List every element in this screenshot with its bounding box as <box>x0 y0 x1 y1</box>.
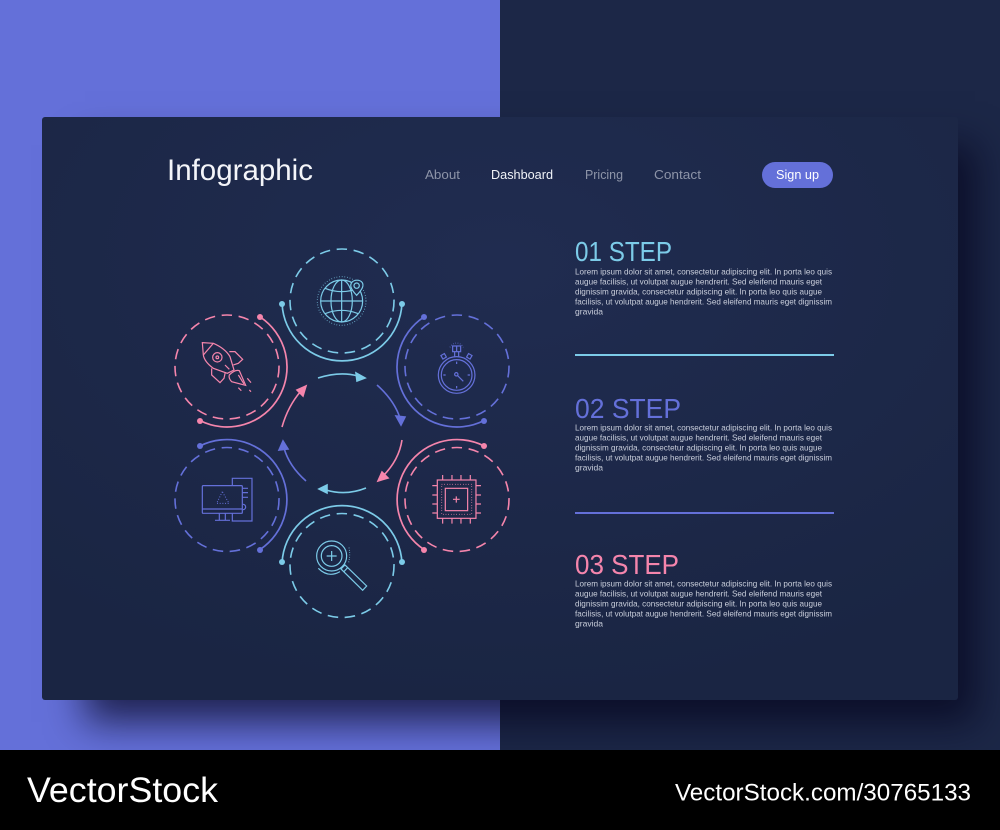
node: magnifier <box>279 506 405 618</box>
text block: step 3: Lorem ipsum dolor sit amet, consectetur adipiscing elit. In porta leo quis <box>575 578 832 588</box>
text block: step 2: augue facilisis, ut volutpat augue hendrerit. Sed eleifend mauris eget <box>575 432 823 442</box>
icon: magnifier <box>317 541 367 590</box>
divider: step 2 <box>575 512 834 514</box>
text block: step 1: gravida <box>575 306 603 316</box>
watermark: url: VectorStock.com/30765133 <box>675 780 971 806</box>
icon: stopwatch <box>438 343 475 393</box>
arrow: upper left <box>282 386 306 427</box>
arrow: lower right <box>378 440 402 481</box>
text block: step 1: Lorem ipsum dolor sit amet, consectetur adipiscing elit. In porta leo quis <box>575 266 832 276</box>
step 2 <box>575 393 834 514</box>
node: stopwatch <box>397 314 509 427</box>
node: globe <box>279 249 405 361</box>
text block: step 2: facilisis, ut volutpat augue hendrerit. Sed eleifend mauris eget dignissim <box>575 452 832 462</box>
icon: globe with pin <box>317 277 366 325</box>
watermark bar <box>0 750 1000 830</box>
text block: step 1: augue facilisis, ut volutpat augue hendrerit. Sed eleifend mauris eget <box>575 276 823 286</box>
heading: 02 STEP: 02 STEP <box>575 393 681 424</box>
step 3 <box>575 549 832 628</box>
icon: microchip <box>432 475 481 524</box>
main card <box>42 117 958 700</box>
background: right navy panel <box>500 0 1000 750</box>
text block: step 1 <box>575 266 832 316</box>
navigation <box>425 167 701 182</box>
background: left indigo panel <box>0 0 500 750</box>
text block: step 3: dignissim gravida, consectetur adipiscing elit. In porta leo quis augue <box>575 598 822 608</box>
text block: step 3: augue facilisis, ut volutpat augue hendrerit. Sed eleifend mauris eget <box>575 588 823 598</box>
title: Infographic <box>167 154 313 187</box>
nav: About: About <box>425 167 460 182</box>
arrow: lower left <box>279 441 306 481</box>
nav: Dashboard: Dashboard <box>491 167 553 182</box>
arrow: upper right <box>377 385 405 425</box>
arrow: bottom <box>319 485 366 493</box>
heading: 01 STEP: 01 STEP <box>575 236 672 267</box>
text block: step 1: facilisis, ut volutpat augue hendrerit. Sed eleifend mauris eget dignissim <box>575 296 832 306</box>
sign up button <box>762 162 833 188</box>
text block: step 2: gravida <box>575 462 603 472</box>
cycle diagram <box>175 249 509 618</box>
watermark: logo: VectorStock <box>27 771 219 810</box>
text block: step 3 <box>575 578 832 628</box>
node: monitor <box>175 440 287 553</box>
text block: step 2: dignissim gravida, consectetur adipiscing elit. In porta leo quis augue <box>575 442 822 452</box>
icon: rocket <box>202 343 251 392</box>
arrow: top <box>318 373 365 381</box>
node: rocket <box>175 314 287 427</box>
text block: step 3: facilisis, ut volutpat augue hendrerit. Sed eleifend mauris eget dignissim <box>575 608 832 618</box>
divider: step 1 <box>575 354 834 356</box>
node: microchip <box>397 440 509 553</box>
card shadow <box>110 170 950 697</box>
heading: 03 STEP: 03 STEP <box>575 549 679 580</box>
nav: Pricing: Pricing <box>585 167 623 182</box>
text block: step 1: dignissim gravida, consectetur adipiscing elit. In porta leo quis augue <box>575 286 822 296</box>
step 1 <box>575 236 834 356</box>
icon: desktop computer <box>202 478 252 521</box>
text block: step 3: gravida <box>575 618 603 628</box>
nav: Contact: Contact <box>654 167 701 182</box>
sign up button: Sign up <box>776 167 819 182</box>
text block: step 2 <box>575 422 832 472</box>
text block: step 2: Lorem ipsum dolor sit amet, consectetur adipiscing elit. In porta leo quis <box>575 422 832 432</box>
